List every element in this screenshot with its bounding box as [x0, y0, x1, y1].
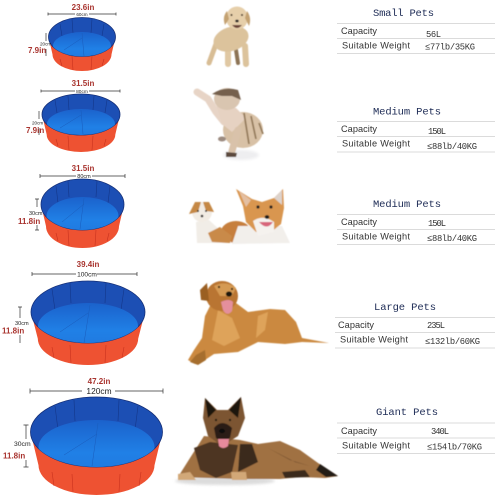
icon: bulldog	[197, 88, 263, 160]
panel: giant pets specs: 340L	[431, 427, 449, 437]
pool 4 dimensions: 30cm	[15, 321, 29, 327]
pool 5: giant	[30, 397, 162, 495]
pool 3: medium	[41, 179, 124, 248]
panel: medium pets specs: Medium Pets	[373, 106, 441, 118]
panel: medium pets specs second: Capacity	[341, 217, 377, 227]
pool 5 dimensions: 47.2in	[88, 377, 110, 386]
pool 1 dimensions	[28, 3, 116, 56]
panel: large pets specs: Large Pets	[374, 302, 436, 314]
pool 5 dimensions: 120cm	[86, 386, 112, 396]
panel: medium pets specs	[337, 106, 495, 152]
pool 4 dimensions	[2, 260, 137, 343]
panel: small pets specs: Small Pets	[373, 8, 434, 20]
pool 4 dimensions: 11.8in	[2, 326, 24, 336]
panel: large pets specs: Capacity	[338, 320, 374, 330]
pool 2: medium	[42, 94, 120, 152]
panel: small pets specs: 56L	[426, 30, 441, 40]
icon: corgi and puppy	[189, 189, 290, 244]
pool 4: large	[31, 281, 145, 365]
pool 3 dimensions	[18, 164, 125, 230]
pool 1 dimensions: 23.6in	[72, 3, 94, 12]
panel: small pets specs	[337, 8, 495, 54]
panel: medium pets specs: Suitable Weight	[342, 138, 410, 148]
pool 4 dimensions: 39.4in	[77, 260, 99, 269]
panel: large pets specs: Suitable Weight	[340, 334, 408, 344]
panel: small pets specs: ≤77lb/35KG	[425, 42, 475, 52]
pool 1 dimensions: 7.9in	[28, 46, 46, 55]
panel: medium pets specs second: ≤88lb/40KG	[427, 234, 477, 244]
pool 1 dimensions: 60cm	[76, 12, 88, 17]
panel: small pets specs: Suitable Weight	[342, 40, 410, 50]
pool 2 dimensions: 20cm	[32, 120, 43, 126]
pool 3 dimensions: 80cm	[77, 174, 91, 180]
panel: large pets specs: ≤132lb/60KG	[425, 337, 480, 347]
pool 1 dimensions: 20cm	[40, 42, 51, 46]
panel: medium pets specs: ≤88lb/40KG	[427, 142, 477, 152]
panel: medium pets specs second: 150L	[428, 219, 446, 229]
pool 2 dimensions	[26, 79, 120, 135]
panel: medium pets specs second: Suitable Weight	[342, 232, 410, 242]
panel: giant pets specs: Suitable Weight	[342, 440, 410, 450]
panel: medium pets specs second	[337, 199, 495, 244]
pool 2 dimensions: 7.9in	[26, 126, 44, 135]
panel: giant pets specs	[337, 407, 495, 454]
pool 4 dimensions: 100cm	[77, 272, 97, 278]
pool 5 dimensions: 11.8in	[3, 452, 25, 460]
pool 3 dimensions: 31.5in	[72, 164, 94, 173]
pool 2 dimensions: 31.5in	[72, 79, 94, 88]
pool 3 dimensions: 30cm	[29, 211, 43, 217]
panel: medium pets specs: 150L	[428, 127, 446, 137]
panel: giant pets specs: Giant Pets	[376, 407, 438, 419]
panel: giant pets specs: Capacity	[341, 426, 377, 436]
panel: large pets specs: 235L	[427, 321, 445, 331]
panel: large pets specs	[335, 302, 495, 348]
pool 5 dimensions	[3, 377, 163, 467]
panel: small pets specs: Capacity	[341, 26, 377, 36]
pool 2 dimensions: 80cm	[76, 89, 88, 95]
panel: giant pets specs: ≤154lb/70KG	[427, 442, 482, 452]
pool 3 dimensions: 11.8in	[18, 217, 40, 226]
icon: golden retriever	[188, 281, 329, 365]
pool 5 dimensions: 30cm	[14, 441, 31, 448]
pool 1: small	[48, 18, 116, 71]
panel: medium pets specs second: Medium Pets	[373, 199, 441, 211]
panel: medium pets specs: Capacity	[341, 124, 377, 134]
icon: german shepherd	[175, 397, 338, 485]
icon: labrador puppy	[209, 6, 252, 64]
